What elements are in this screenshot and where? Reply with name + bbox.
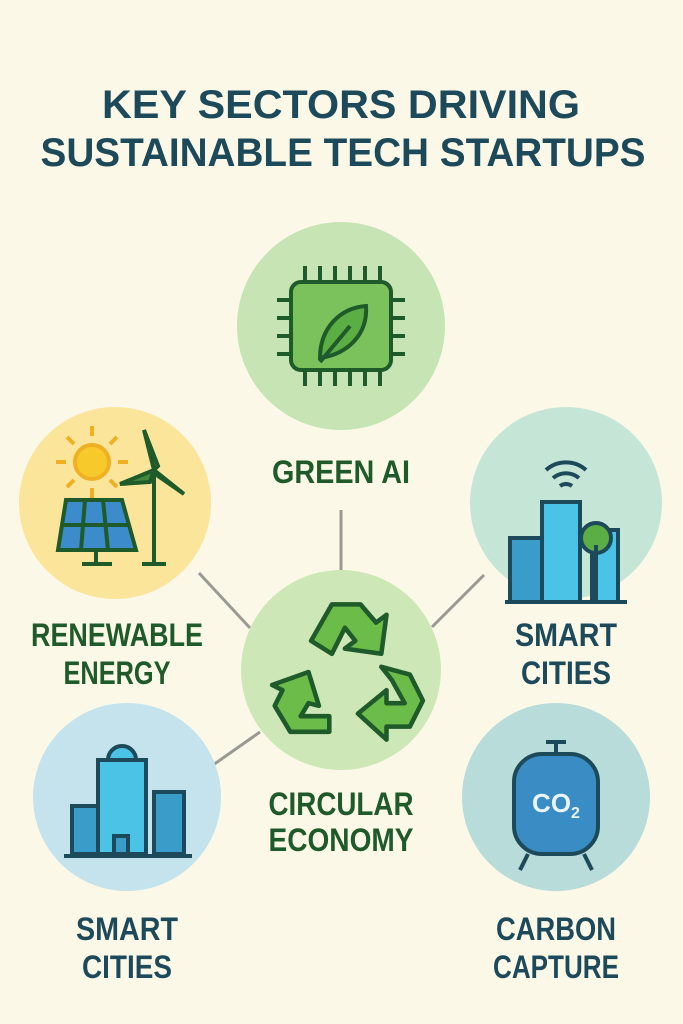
panel: carbon capture: CO: [532, 788, 571, 818]
icon: buildings: [64, 746, 192, 856]
panel: green AI: [237, 222, 445, 490]
label: renewable energy: RENEWABLE: [31, 617, 203, 653]
label: smart cities right: SMART: [515, 617, 617, 653]
title: SUSTAINABLE TECH STARTUPS: [40, 131, 646, 175]
label: renewable energy: ENERGY: [64, 655, 170, 691]
label: carbon capture: CARBON: [496, 911, 616, 947]
panel: renewable energy: [19, 407, 211, 691]
panel: smart cities right: [470, 407, 662, 691]
label: smart cities right: [515, 617, 617, 691]
icon: recycle arrows: [272, 604, 423, 740]
panel: carbon capture: [462, 703, 650, 985]
label: carbon capture: CAPTURE: [493, 949, 619, 985]
icon: chip with leaf: [277, 266, 405, 386]
title: KEY SECTORS DRIVING: [102, 83, 580, 127]
icon: city with wifi: [505, 462, 627, 602]
label: circular economy: CIRCULAR: [268, 786, 414, 822]
title: [40, 83, 646, 175]
label: carbon capture: [493, 911, 619, 985]
label: smart cities left: CITIES: [82, 949, 172, 985]
panel: circular economy: [241, 570, 441, 858]
label: smart cities left: SMART: [76, 911, 178, 947]
label: green AI: GREEN AI: [272, 454, 410, 490]
icon: solar panel and turbine: [58, 430, 184, 564]
label: smart cities right: CITIES: [521, 655, 611, 691]
panel: carbon capture: 2: [571, 805, 580, 822]
icon: CO2 tank: [514, 742, 598, 870]
label: circular economy: [268, 786, 414, 858]
label: renewable energy: [31, 617, 203, 691]
label: circular economy: ECONOMY: [268, 822, 414, 858]
icon: sun: [56, 426, 128, 498]
connector lines: [199, 510, 484, 765]
panel: smart cities left: [33, 703, 221, 985]
label: smart cities left: [76, 911, 178, 985]
